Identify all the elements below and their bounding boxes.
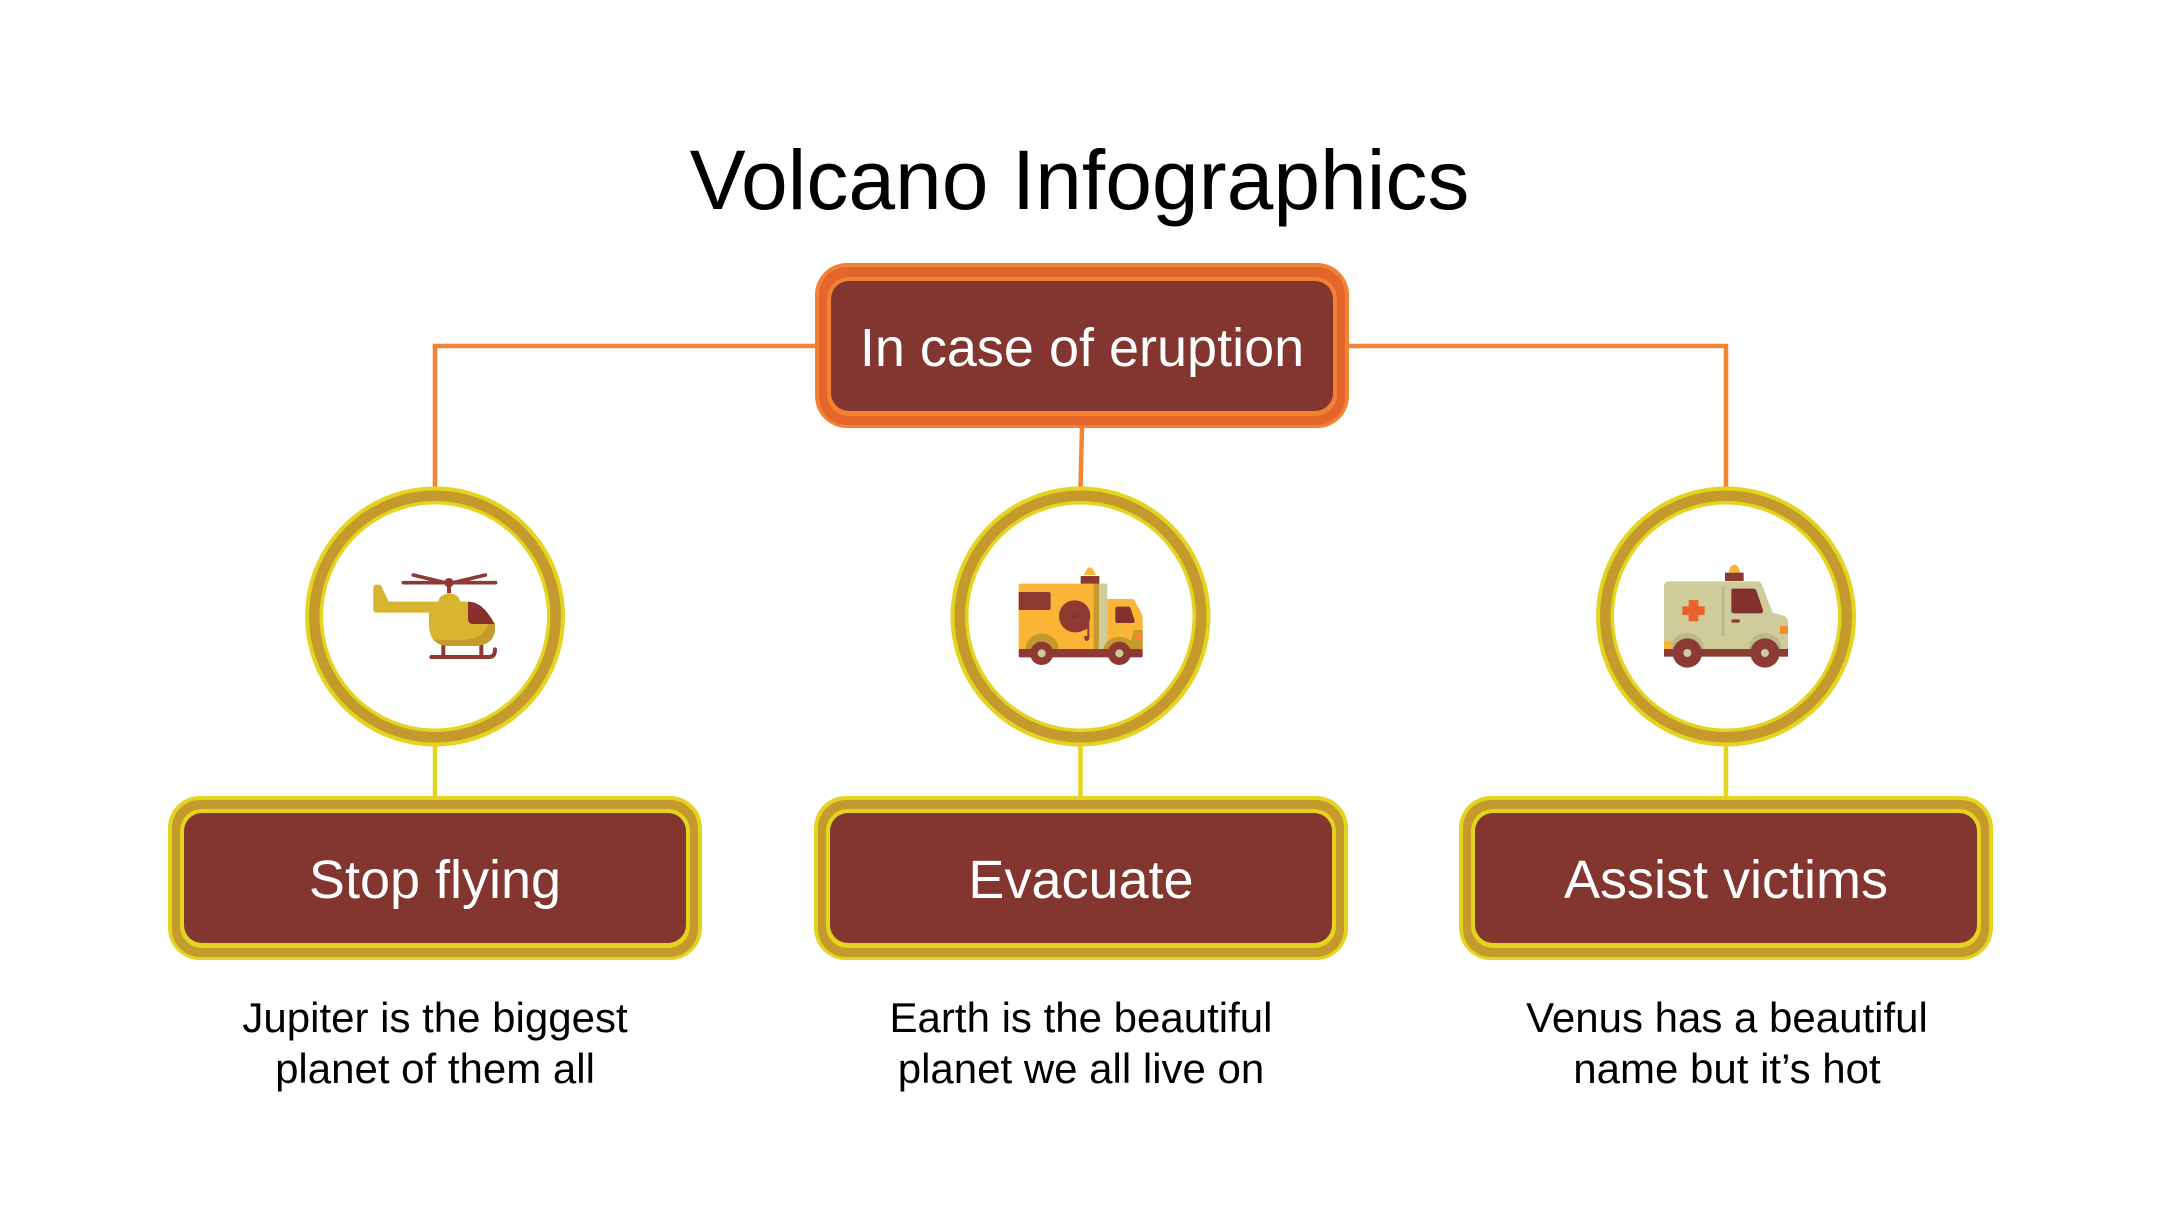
box: Assist victims: Assist victims xyxy=(1564,850,1888,910)
text: Jupiter description: Jupiter is the biggest xyxy=(242,994,628,1041)
box: Stop flying xyxy=(168,796,702,960)
text: Venus description: name but it’s hot xyxy=(1573,1045,1881,1092)
yellow connectors xyxy=(435,746,1726,797)
main box: In case of eruption xyxy=(815,263,1349,428)
text: Venus description: Venus has a beautiful xyxy=(1526,994,1928,1041)
box: Evacuate xyxy=(814,796,1348,960)
icon: helicopter xyxy=(373,575,496,657)
text: Earth description: planet we all live on xyxy=(898,1045,1264,1092)
box: Stop flying: Stop flying xyxy=(309,850,561,910)
text: Earth description: Earth is the beautiful xyxy=(890,994,1272,1041)
icon: ambulance xyxy=(1664,565,1788,668)
text: Jupiter description xyxy=(242,994,628,1092)
circle: helicopter xyxy=(305,486,565,746)
title: Volcano Infographics xyxy=(690,133,1469,227)
main box: In case of eruption: In case of eruption xyxy=(860,318,1304,378)
text: Earth description xyxy=(890,994,1272,1092)
icon: fire truck xyxy=(1019,567,1143,665)
circle: ambulance xyxy=(1596,486,1856,746)
text: Jupiter description: planet of them all xyxy=(275,1045,595,1092)
text: Venus description xyxy=(1526,994,1928,1092)
orange connectors from main box xyxy=(435,346,1726,487)
circle: fire truck xyxy=(950,486,1210,746)
box: Assist victims xyxy=(1459,796,1993,960)
box: Evacuate: Evacuate xyxy=(968,850,1194,910)
